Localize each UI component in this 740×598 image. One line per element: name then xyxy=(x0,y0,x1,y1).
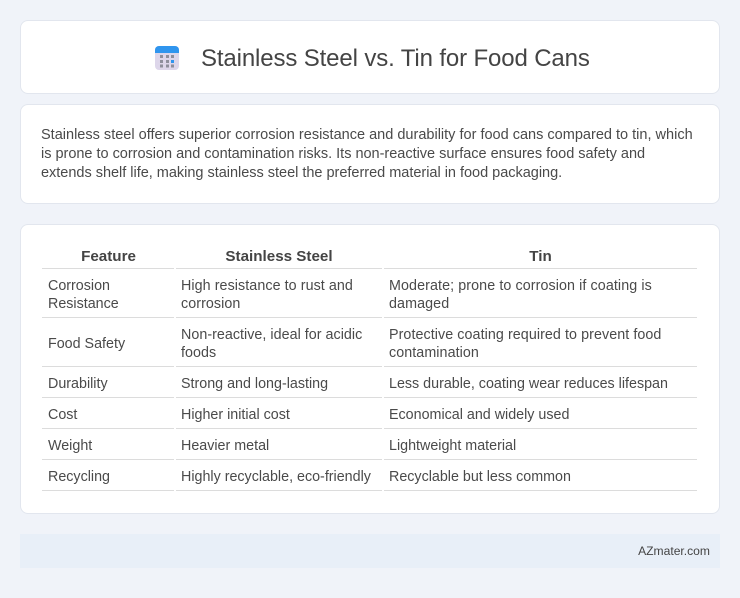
row: cost xyxy=(48,407,569,423)
comparison table: Moderate; prone to corrosion if coating is xyxy=(389,278,652,294)
table panel xyxy=(20,224,720,514)
row: recycling xyxy=(48,469,571,485)
comparison table: damaged xyxy=(389,296,449,312)
summary text: Stainless steel offers superior corrosion resistance and durability for food cans compared to tin, which xyxy=(41,126,693,142)
comparison table: Protective coating required to prevent food xyxy=(389,327,661,343)
comparison table: Food Safety xyxy=(48,336,125,352)
comparison table: Highly recyclable, eco-friendly xyxy=(181,469,371,485)
comparison table: Strong and long-lasting xyxy=(181,376,328,392)
footer bar xyxy=(20,534,720,568)
comparison table: Cost xyxy=(48,407,77,423)
comparison table: Economical and widely used xyxy=(389,407,569,423)
title: Stainless Steel vs. Tin for Food Cans xyxy=(201,45,590,72)
comparison table: Tin xyxy=(529,248,552,265)
table header row xyxy=(81,248,552,265)
comparison table: Heavier metal xyxy=(181,438,269,454)
comparison table: foods xyxy=(181,345,216,361)
comparison table: Feature xyxy=(81,248,136,265)
summary text: extends shelf life, making stainless steel the preferred material in food packaging. xyxy=(41,165,562,181)
comparison table: High resistance to rust and xyxy=(181,278,353,294)
summary panel xyxy=(20,104,720,204)
comparison table: Resistance xyxy=(48,296,119,312)
comparison table: Recyclable but less common xyxy=(389,469,571,485)
footer credit: AZmater.com xyxy=(638,544,710,558)
comparison table: corrosion xyxy=(181,296,240,312)
summary text xyxy=(41,126,693,181)
icon: calendar xyxy=(155,46,179,70)
comparison table: Recycling xyxy=(48,469,110,485)
summary text: is prone to corrosion and contamination risks. Its non-reactive surface ensures food safety and xyxy=(41,146,645,162)
comparison table: Lightweight material xyxy=(389,438,516,454)
comparison table: Non-reactive, ideal for acidic xyxy=(181,327,362,343)
comparison table: Durability xyxy=(48,376,108,392)
row: corrosion resistance xyxy=(48,278,652,312)
comparison table: Weight xyxy=(48,438,92,454)
comparison table xyxy=(42,248,697,491)
row: durability xyxy=(48,376,668,392)
comparison table: Stainless Steel xyxy=(225,248,333,265)
comparison table: Less durable, coating wear reduces lifespan xyxy=(389,376,668,392)
row: weight xyxy=(48,438,516,454)
row: food safety xyxy=(48,327,661,361)
comparison table: contamination xyxy=(389,345,479,361)
header panel xyxy=(20,20,720,94)
comparison table: Corrosion xyxy=(48,278,110,294)
comparison table: Higher initial cost xyxy=(181,407,290,423)
